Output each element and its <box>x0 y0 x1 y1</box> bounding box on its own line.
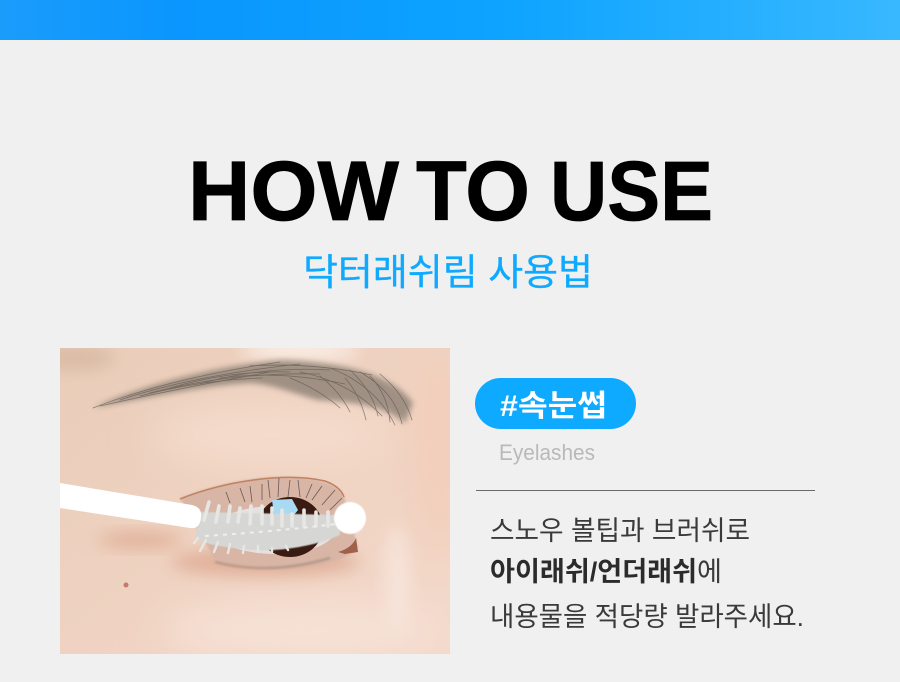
eye <box>180 477 358 569</box>
description: 스노우 볼팁과 브러쉬로 <box>490 516 750 546</box>
photo: eye with mascara wand <box>60 348 450 654</box>
brush ball tip <box>334 502 366 534</box>
title <box>188 144 713 238</box>
skin <box>60 348 450 654</box>
divider <box>476 490 815 491</box>
title: HOW <box>188 144 400 238</box>
hashtag pill: #속눈썹 <box>500 390 607 423</box>
description <box>490 516 804 632</box>
mascara brush <box>194 502 340 553</box>
wand handle <box>60 483 201 528</box>
eyelashes label: Eyelashes <box>499 440 595 465</box>
eyebrow <box>93 360 413 425</box>
hashtag pill <box>475 378 636 429</box>
description: 아이래쉬/언더래쉬에 <box>490 557 722 587</box>
description: 내용물을 적당량 발라주세요. <box>490 602 804 632</box>
title: USE <box>550 144 713 238</box>
subtitle: 닥터래쉬림 사용법 <box>303 252 593 293</box>
title: TO <box>416 144 530 238</box>
top gradient bar <box>0 0 900 40</box>
